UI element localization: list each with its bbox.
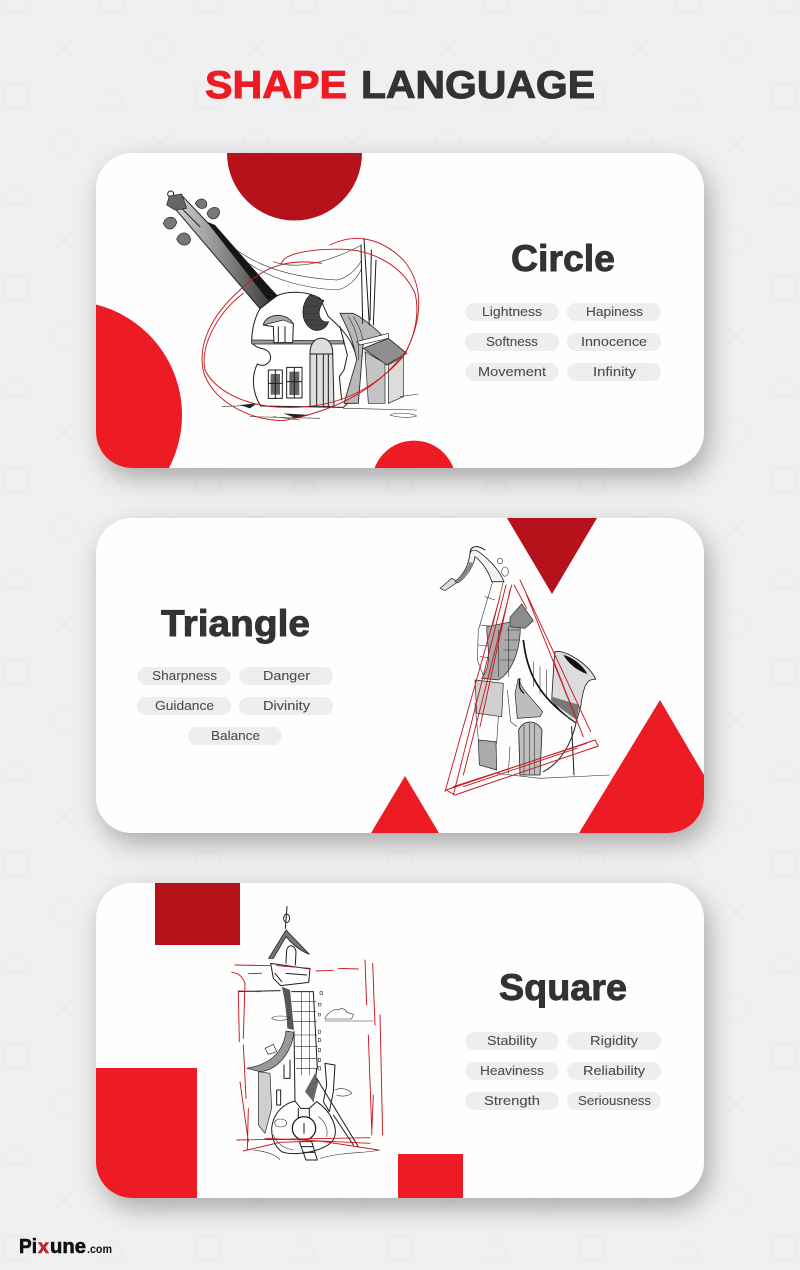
small red circle bbox=[374, 440, 454, 468]
dark red triangle bbox=[507, 518, 597, 594]
tags: triangle: Balance bbox=[211, 728, 260, 743]
large red triangle bbox=[579, 700, 704, 833]
tags: triangle: Sharpness bbox=[152, 668, 218, 683]
illustration: violin house bbox=[163, 191, 419, 421]
tags: triangle: Guidance bbox=[155, 698, 214, 713]
dark red circle bbox=[227, 153, 362, 220]
illustration: banjo tower bbox=[232, 907, 383, 1160]
tags: triangle bbox=[137, 667, 333, 745]
tags: square bbox=[465, 1032, 661, 1110]
title: SHAPE bbox=[205, 64, 347, 107]
large red circle bbox=[96, 304, 182, 468]
panel: square bbox=[96, 883, 704, 1198]
tags: circle: Hapiness bbox=[586, 304, 644, 319]
large red square bbox=[96, 1068, 197, 1198]
logo: Pixune.com: x bbox=[38, 1237, 49, 1258]
logo: Pixune.com: Pi bbox=[19, 1236, 37, 1258]
tags: circle: Innocence bbox=[581, 334, 647, 349]
tags: circle: Infinity bbox=[593, 364, 637, 379]
title: LANGUAGE bbox=[361, 64, 595, 107]
heading: Triangle: Triangle bbox=[161, 603, 310, 644]
heading: Circle: Circle bbox=[511, 238, 615, 279]
small red square bbox=[398, 1154, 463, 1198]
tags: circle: Movement bbox=[478, 364, 546, 379]
tags: square: Stability bbox=[487, 1033, 538, 1048]
logo: Pixune.com: .com bbox=[87, 1242, 112, 1256]
panel: circle bbox=[86, 148, 724, 492]
tags: circle: Lightness bbox=[482, 304, 543, 319]
logo: Pixune.com: une bbox=[50, 1236, 86, 1258]
title bbox=[205, 64, 595, 107]
tags: triangle: Divinity bbox=[263, 698, 311, 713]
tags: square: Reliability bbox=[583, 1063, 646, 1078]
panel: triangle bbox=[96, 518, 704, 833]
tags: triangle: Danger bbox=[263, 668, 311, 683]
tags: circle: Softness bbox=[486, 334, 539, 349]
dark red square bbox=[155, 883, 240, 945]
small red triangle bbox=[371, 776, 439, 833]
tags: square: Seriousness bbox=[578, 1093, 652, 1108]
tags: square: Strength bbox=[484, 1093, 540, 1108]
tags: square: Heaviness bbox=[480, 1063, 545, 1078]
tags: circle bbox=[465, 303, 661, 381]
logo: Pixune.com bbox=[19, 1236, 112, 1258]
tags: square: Rigidity bbox=[590, 1033, 639, 1048]
illustration: saxophone house bbox=[440, 547, 610, 795]
heading: Square: Square bbox=[499, 967, 627, 1008]
